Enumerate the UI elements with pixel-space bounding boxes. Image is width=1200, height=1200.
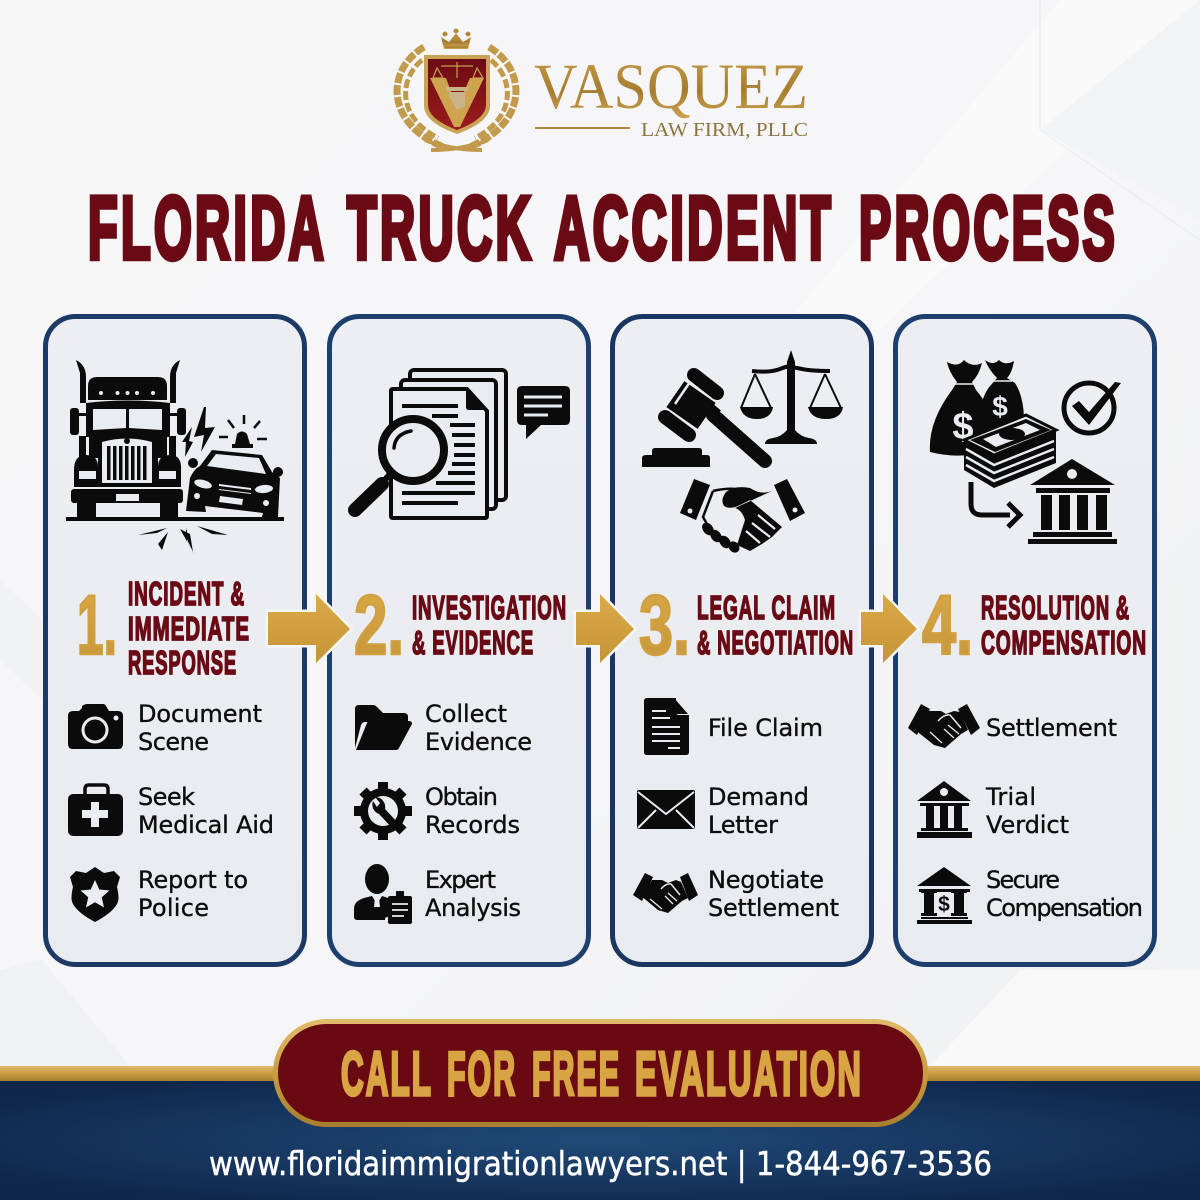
arrow: step 3 to 4 [861, 594, 917, 663]
call to action text: FREE [532, 1040, 621, 1109]
item: expert analysis: Analysis [425, 894, 521, 922]
item: trial verdict: Verdict [986, 811, 1069, 839]
icon: gear with wrench [354, 782, 412, 840]
item: seek medical aid [138, 783, 274, 839]
icon: camera [68, 704, 123, 749]
panel: step 3 legal claim [612, 316, 872, 964]
step heading [981, 589, 1147, 661]
item: seek medical aid: Seek [138, 783, 195, 811]
icon: money bags, cash, check and bank: $ [992, 391, 1008, 422]
item: obtain records: Records [425, 811, 520, 839]
step number 2: 2. [354, 578, 404, 672]
item: expert analysis: Expert [425, 866, 496, 894]
icon: handshake [680, 479, 805, 555]
icon: gavel and scales [642, 350, 843, 467]
panel frame [896, 316, 1154, 964]
item: settlement: Settlement [986, 714, 1117, 742]
arrow to bank [971, 482, 1020, 527]
item: obtain records: Obtain [425, 783, 498, 811]
icon: shield [424, 55, 490, 134]
item: demand letter [708, 783, 809, 839]
item: demand letter: Letter [708, 811, 778, 839]
call to action text: FOR [447, 1040, 517, 1109]
item: demand letter: Demand [708, 783, 809, 811]
item: report to police [138, 866, 248, 922]
panel: step 2 investigation [330, 316, 588, 964]
item: negotiate settlement: Settlement [708, 894, 839, 922]
item: collect evidence [425, 700, 532, 756]
logo: Vasquez Law Firm [397, 28, 808, 150]
icon: police badge [70, 867, 120, 922]
step heading: LEGAL CLAIM [697, 589, 836, 626]
title: FLORIDA [88, 178, 327, 278]
check circle [1064, 382, 1121, 433]
title: ACCIDENT [554, 178, 834, 278]
item: secure compensation: Compensation [986, 894, 1143, 922]
item: report to police: Report to [138, 866, 248, 894]
icon: truck and police car collision [66, 360, 284, 554]
arrow: step 1 to 2 [268, 594, 350, 663]
icon: money bags, cash, check and bank [930, 360, 1121, 544]
icon: bank with dollar: $ [938, 893, 950, 916]
bank [1028, 459, 1117, 544]
website and phone: www.floridaimmigrationlawyers.net | 1-844-967-3536 [209, 1144, 992, 1183]
item: expert analysis [425, 866, 521, 922]
icon: envelope [637, 790, 695, 829]
firm name: VASQUEZ [534, 51, 808, 123]
speech bubble [517, 386, 570, 439]
firm subtitle: LAW FIRM, PLLC [641, 119, 808, 141]
icon: laurel wreath [397, 47, 516, 150]
icon: handshake small [633, 873, 698, 913]
step heading: INCIDENT & [128, 575, 245, 612]
icon: money bags, cash, check and bank: $ [952, 406, 974, 448]
panel frame [330, 316, 588, 964]
call to action text: EVALUATION [635, 1040, 863, 1109]
call to action text [341, 1040, 863, 1109]
icon: expert with clipboard [354, 864, 412, 924]
step heading: & NEGOTIATION [697, 624, 854, 661]
icon: handshake small [908, 704, 980, 748]
icon: documents and magnifier [355, 370, 570, 518]
item: file claim: File Claim [708, 714, 823, 742]
item: seek medical aid: Medical Aid [138, 811, 274, 839]
arrow: step 2 to 3 [576, 594, 634, 663]
step heading: IMMEDIATE [128, 610, 250, 647]
item: document scene: Scene [138, 728, 209, 756]
panel frame [612, 316, 872, 964]
step heading: RESPONSE [128, 644, 237, 681]
icon: courthouse [917, 781, 972, 838]
step heading: & EVIDENCE [412, 624, 534, 661]
item: report to police: Police [138, 894, 209, 922]
item: collect evidence: Collect [425, 700, 507, 728]
item: negotiate settlement [708, 866, 839, 922]
step heading [697, 589, 854, 661]
step number 3: 3. [639, 578, 690, 672]
item: trial verdict [985, 783, 1069, 839]
item: secure compensation [986, 866, 1143, 922]
item: negotiate settlement: Negotiate [708, 866, 824, 894]
item: document scene [138, 700, 262, 756]
panel: step 1 incident [46, 316, 304, 964]
icon: crown [441, 28, 471, 49]
step number 4: 4. [922, 578, 973, 672]
icon: medical kit [68, 785, 123, 836]
item: trial verdict: Trial [985, 783, 1036, 811]
step heading: INVESTIGATION [412, 589, 567, 626]
item: collect evidence: Evidence [425, 728, 532, 756]
step heading [412, 589, 567, 661]
call to action pill [276, 1022, 926, 1124]
icon: bank with dollar [917, 867, 972, 924]
item: obtain records [425, 783, 520, 839]
item: secure compensation: Secure [986, 866, 1060, 894]
icon: file document [644, 698, 689, 755]
panel: step 4 resolution [896, 316, 1154, 964]
step number 1: 1. [77, 578, 117, 672]
call to action text: CALL [341, 1040, 433, 1109]
item: document scene: Document [138, 700, 262, 728]
icon: folder [355, 705, 412, 750]
footer band [0, 1066, 1200, 1200]
panel frame [46, 316, 304, 964]
title: TRUCK [347, 178, 534, 278]
step heading [128, 575, 250, 681]
title [88, 178, 1118, 278]
